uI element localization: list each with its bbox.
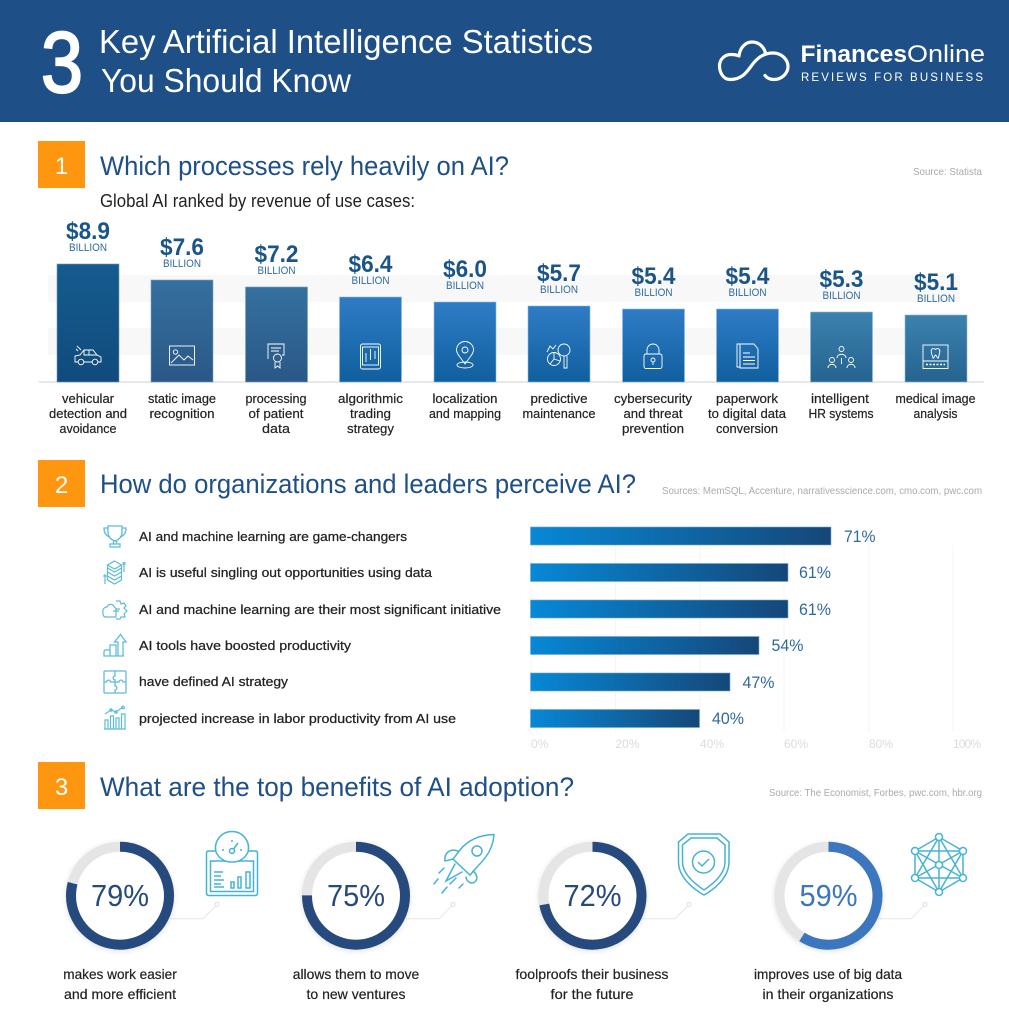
horizontal bar chart: 20% <box>616 737 640 751</box>
column labels: and threat <box>624 406 683 421</box>
horizontal bar chart: 61% <box>799 600 831 619</box>
icon: line and bar chart <box>104 706 126 729</box>
column: processing of patient data: $7.2 <box>254 241 298 268</box>
column labels: algorithmic <box>338 391 404 406</box>
row labels <box>139 529 501 726</box>
horizontal bar chart: 71% <box>844 527 876 546</box>
column: predictive maintenance <box>528 260 590 382</box>
label <box>516 966 668 1002</box>
horizontal bar chart: 47% <box>742 673 774 692</box>
column: processing of patient data <box>246 241 308 382</box>
column: algorithmic trading strategy <box>340 251 402 382</box>
label: makes work easier <box>63 966 177 982</box>
column labels: detection and <box>49 406 127 421</box>
label: and more efficient <box>64 986 176 1002</box>
column labels: recognition <box>150 406 214 421</box>
column labels: avoidance <box>60 421 116 436</box>
big number 3: 3 <box>41 15 83 111</box>
column: vehicular detection: BILLION <box>69 242 107 254</box>
column labels: HR systems <box>808 406 874 421</box>
logo: FinancesOnline: Online <box>907 41 985 68</box>
benefit: makes work easier <box>63 831 258 1002</box>
section 3 heading: 3 <box>55 774 68 801</box>
column: localization and mapping: $6.0 <box>443 256 487 283</box>
row labels: AI is useful singling out opportunities using data <box>139 565 433 580</box>
horizontal bar chart <box>530 527 981 751</box>
column labels: and mapping <box>429 406 501 421</box>
horizontal bar chart: 0% <box>531 737 549 751</box>
column: localization and mapping <box>434 256 496 382</box>
benefit: foolproofs business <box>516 834 729 1002</box>
horizontal bar chart: 40% <box>700 737 724 751</box>
title: You Should Know <box>101 62 351 99</box>
horizontal bar chart: 40% <box>712 709 744 728</box>
benefit: new ventures: 75% <box>327 878 385 913</box>
column: static image recognition: BILLION <box>163 258 201 270</box>
column: paperwork conversion: BILLION <box>728 287 767 299</box>
section 2 heading: How do organizations and leaders perceive AI? <box>100 469 636 499</box>
column: vehicular detection: $8.9 <box>66 218 110 245</box>
column: localization and mapping: BILLION <box>446 280 484 292</box>
title: Key Artificial Intelligence Statistics <box>99 23 593 60</box>
column: cybersecurity <box>622 263 684 382</box>
icon: data stack <box>104 561 125 584</box>
title <box>99 23 593 99</box>
section 2 heading: 2 <box>55 472 68 499</box>
icon: gauge dashboard <box>206 831 258 896</box>
column labels: analysis <box>914 406 958 421</box>
column: algorithmic trading strategy: $6.4 <box>348 251 393 278</box>
horizontal bar chart: 54% <box>772 636 804 655</box>
section 1 heading: 1 <box>55 153 68 180</box>
column labels: strategy <box>347 421 395 436</box>
column labels: localization <box>432 391 498 406</box>
row labels: have defined AI strategy <box>139 674 289 689</box>
section 3 heading: What are the top benefits of AI adoption? <box>100 772 574 802</box>
sources for section 3: Source: The Economist, Forbes, pwc.com, hbr.org <box>769 787 982 799</box>
column: algorithmic trading strategy: BILLION <box>352 275 390 287</box>
logo: FinancesOnline <box>720 41 985 84</box>
benefit: big data <box>754 834 966 1002</box>
benefit: big data: 59% <box>800 878 858 913</box>
column labels: to digital data <box>708 406 787 421</box>
icon: network <box>912 834 966 896</box>
column labels: prevention <box>622 421 684 436</box>
label: for the future <box>550 986 634 1002</box>
label <box>754 966 902 1002</box>
label: improves use of big data <box>754 966 902 982</box>
horizontal bar chart: 80% <box>869 737 893 751</box>
column: intelligent HR systems: BILLION <box>822 290 861 302</box>
label: in their organizations <box>762 986 894 1002</box>
column: vehicular detection <box>57 218 119 382</box>
label: allows them to move <box>293 966 419 982</box>
benefit: new ventures <box>293 834 494 1002</box>
section 1 heading: Which processes rely heavily on AI? <box>100 151 509 181</box>
column: intelligent HR systems: $5.3 <box>820 266 864 293</box>
column labels: paperwork <box>716 391 779 406</box>
column labels: predictive <box>530 391 588 406</box>
icon: growth arrow <box>104 634 126 656</box>
row labels: projected increase in labor productivity from AI use <box>139 711 456 726</box>
section 1 heading <box>38 141 509 188</box>
section 2 heading <box>38 460 636 507</box>
column: intelligent HR systems <box>810 266 872 382</box>
column: processing of patient data: BILLION <box>258 265 296 277</box>
icon: brain gear <box>103 601 127 619</box>
benefit: makes work easier: 79% <box>91 878 149 913</box>
column labels: intelligent <box>811 391 869 406</box>
icon: puzzle <box>104 671 126 693</box>
horizontal bar chart: 60% <box>784 737 808 751</box>
label <box>63 966 177 1002</box>
benefit: foolproofs business: 72% <box>564 878 622 913</box>
horizontal bar chart: 100% <box>953 737 981 751</box>
row labels: AI tools have boosted productivity <box>139 638 352 653</box>
logo: FinancesOnline: REVIEWS FOR BUSINESS <box>801 72 983 84</box>
label: foolproofs their business <box>516 966 668 982</box>
row labels: AI and machine learning are their most significant initiative <box>139 602 501 617</box>
column chart: AI revenue by use case <box>39 218 984 436</box>
column: predictive maintenance: BILLION <box>540 284 578 296</box>
row labels: AI and machine learning are game-changers <box>139 529 408 544</box>
column labels: vehicular <box>62 391 115 406</box>
subtitle: Global AI ranked by revenue of use cases: <box>100 191 415 211</box>
column: static image recognition: $7.6 <box>160 234 204 261</box>
column labels: static image <box>148 391 216 406</box>
sources for section 2: Sources: MemSQL, Accenture, narrativesscience.com, cmo.com, pwc.com <box>662 485 982 497</box>
column labels: conversion <box>716 421 778 436</box>
column labels <box>49 391 976 436</box>
column: cybersecurity: $5.4 <box>632 263 676 290</box>
horizontal bar chart: 61% <box>799 563 831 582</box>
column: medical image analysis: $5.1 <box>914 269 958 296</box>
column: cybersecurity: BILLION <box>634 287 673 299</box>
column labels: processing <box>246 391 306 406</box>
column labels: maintenance <box>522 406 596 421</box>
icon: rocket <box>434 834 494 893</box>
label: to new ventures <box>306 986 406 1002</box>
column labels: of patient <box>248 406 304 421</box>
label <box>293 966 419 1002</box>
column: paperwork conversion <box>716 263 778 382</box>
icon: trophy <box>104 526 126 547</box>
column: medical image analysis: BILLION <box>917 293 955 305</box>
column: static image recognition <box>151 234 213 382</box>
column labels: data <box>262 421 291 436</box>
column labels: cybersecurity <box>614 391 693 406</box>
column: paperwork conversion: $5.4 <box>726 263 770 290</box>
icon: shield <box>678 834 729 895</box>
column labels: trading <box>350 406 391 421</box>
header banner <box>0 0 1009 122</box>
column labels: medical image <box>896 391 976 406</box>
column: medical image analysis <box>905 269 967 382</box>
source: Statista: Source: Statista <box>913 166 982 178</box>
logo: FinancesOnline: Finances <box>800 41 907 68</box>
column: predictive maintenance: $5.7 <box>537 260 581 287</box>
section 3 heading <box>38 762 574 809</box>
